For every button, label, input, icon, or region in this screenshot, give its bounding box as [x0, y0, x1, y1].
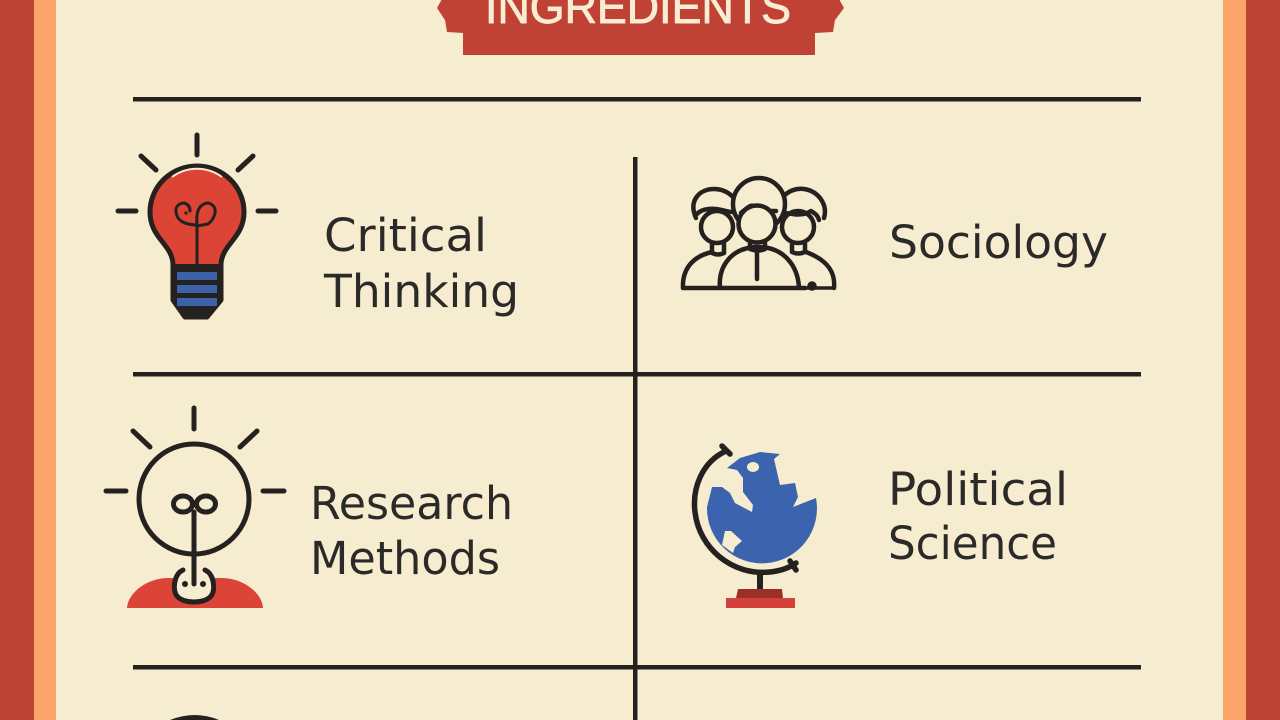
label: Political Science	[888, 463, 1068, 570]
label: Research Methods	[310, 477, 513, 585]
left border	[0, 0, 56, 720]
label: Research Methods: Research	[310, 477, 513, 530]
label: Critical Thinking: Critical	[324, 209, 487, 262]
icon: group of people	[683, 178, 834, 288]
title banner	[437, 0, 844, 55]
table grid lines	[133, 97, 1141, 720]
icon: globe	[694, 446, 817, 608]
label: Research Methods: Methods	[310, 532, 500, 585]
icon: partial dark circle at bottom	[170, 715, 219, 720]
right border	[1223, 0, 1280, 720]
label: Sociology: Sociology	[889, 216, 1108, 269]
label: Political Science: Science	[888, 517, 1057, 570]
label: Political Science: Political	[888, 463, 1068, 516]
icon: red light bulb	[118, 135, 276, 317]
label: Critical Thinking	[323, 209, 519, 318]
label: Critical Thinking: Thinking	[323, 265, 519, 318]
icon: light bulb with red base	[106, 408, 284, 608]
